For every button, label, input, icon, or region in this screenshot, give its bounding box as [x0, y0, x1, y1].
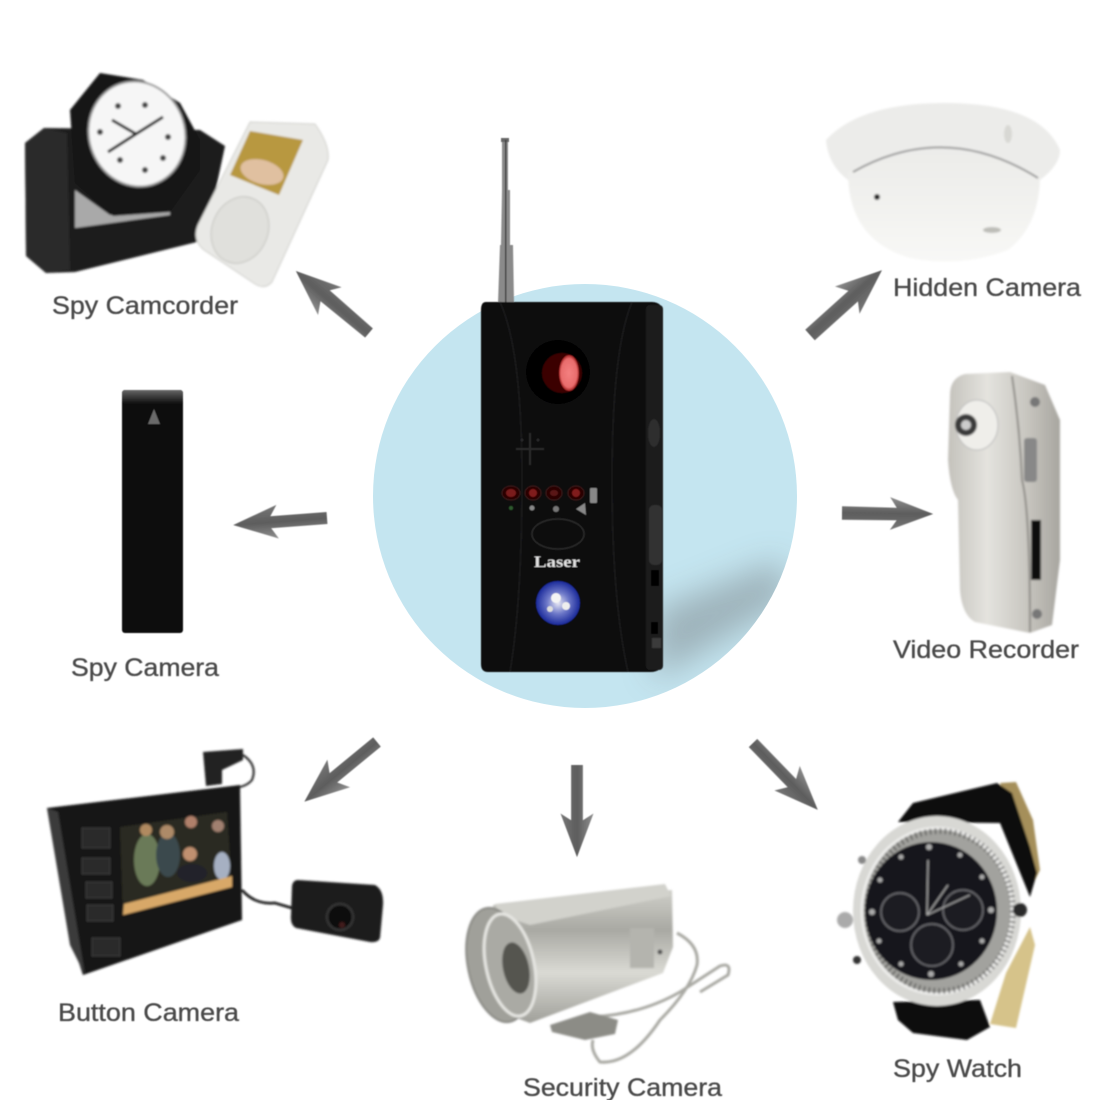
button camera unit	[291, 880, 383, 942]
laser globe	[536, 581, 580, 625]
connector	[550, 1012, 618, 1040]
cable	[242, 890, 292, 908]
arrow: to spy watch	[740, 731, 830, 822]
monitor buttons	[82, 828, 120, 956]
watch dial	[865, 842, 997, 980]
device label: Laser	[534, 554, 580, 571]
subdials	[881, 890, 983, 966]
portable player	[196, 122, 328, 287]
strap back	[1000, 782, 1040, 890]
video recorder label: Video Recorder	[893, 636, 1079, 664]
detector body	[481, 302, 663, 672]
spy camcorder product	[25, 69, 328, 287]
central detector device	[481, 138, 663, 672]
arrow: to security camera	[561, 765, 593, 857]
side switches	[648, 419, 662, 648]
arrow: to spy camera	[232, 501, 328, 542]
antenna	[498, 138, 514, 303]
hidden camera label: Hidden Camera	[893, 274, 1081, 302]
watch case	[837, 816, 1027, 1006]
indicator LEDs	[502, 486, 597, 515]
arrow: to spy camcorder	[283, 258, 380, 348]
monitor screen	[120, 812, 232, 915]
spec sticker	[630, 928, 654, 968]
arrow: to video recorder	[842, 497, 933, 530]
cables	[590, 933, 729, 1062]
laser button	[532, 519, 584, 549]
arrow: to button camera	[293, 728, 388, 815]
video recorder product	[948, 372, 1060, 633]
spy watch product	[837, 782, 1040, 1040]
hour markers	[869, 844, 994, 977]
arrow: to hidden camera	[797, 256, 894, 348]
monitor body	[47, 785, 242, 975]
spy camera product	[122, 390, 183, 633]
screw	[658, 950, 662, 954]
speaker holes	[516, 433, 544, 465]
button camera product	[47, 749, 383, 975]
spy camera label: Spy Camera	[71, 654, 219, 682]
top mini camera	[203, 749, 254, 787]
strap bottom	[893, 1000, 990, 1040]
lens window	[526, 340, 590, 404]
clock	[70, 69, 200, 216]
hidden camera product	[826, 103, 1060, 262]
clock stand	[25, 128, 225, 273]
watch hands	[927, 860, 970, 915]
strap top	[898, 783, 1037, 897]
spy watch label: Spy Watch	[893, 1055, 1022, 1083]
panel: light blue circle behind detector	[373, 284, 797, 708]
security camera product	[457, 884, 729, 1062]
button camera label: Button Camera	[58, 999, 239, 1027]
spy camcorder label: Spy Camcorder	[52, 292, 238, 320]
camera barrel	[493, 890, 673, 1023]
camera front	[457, 902, 544, 1028]
